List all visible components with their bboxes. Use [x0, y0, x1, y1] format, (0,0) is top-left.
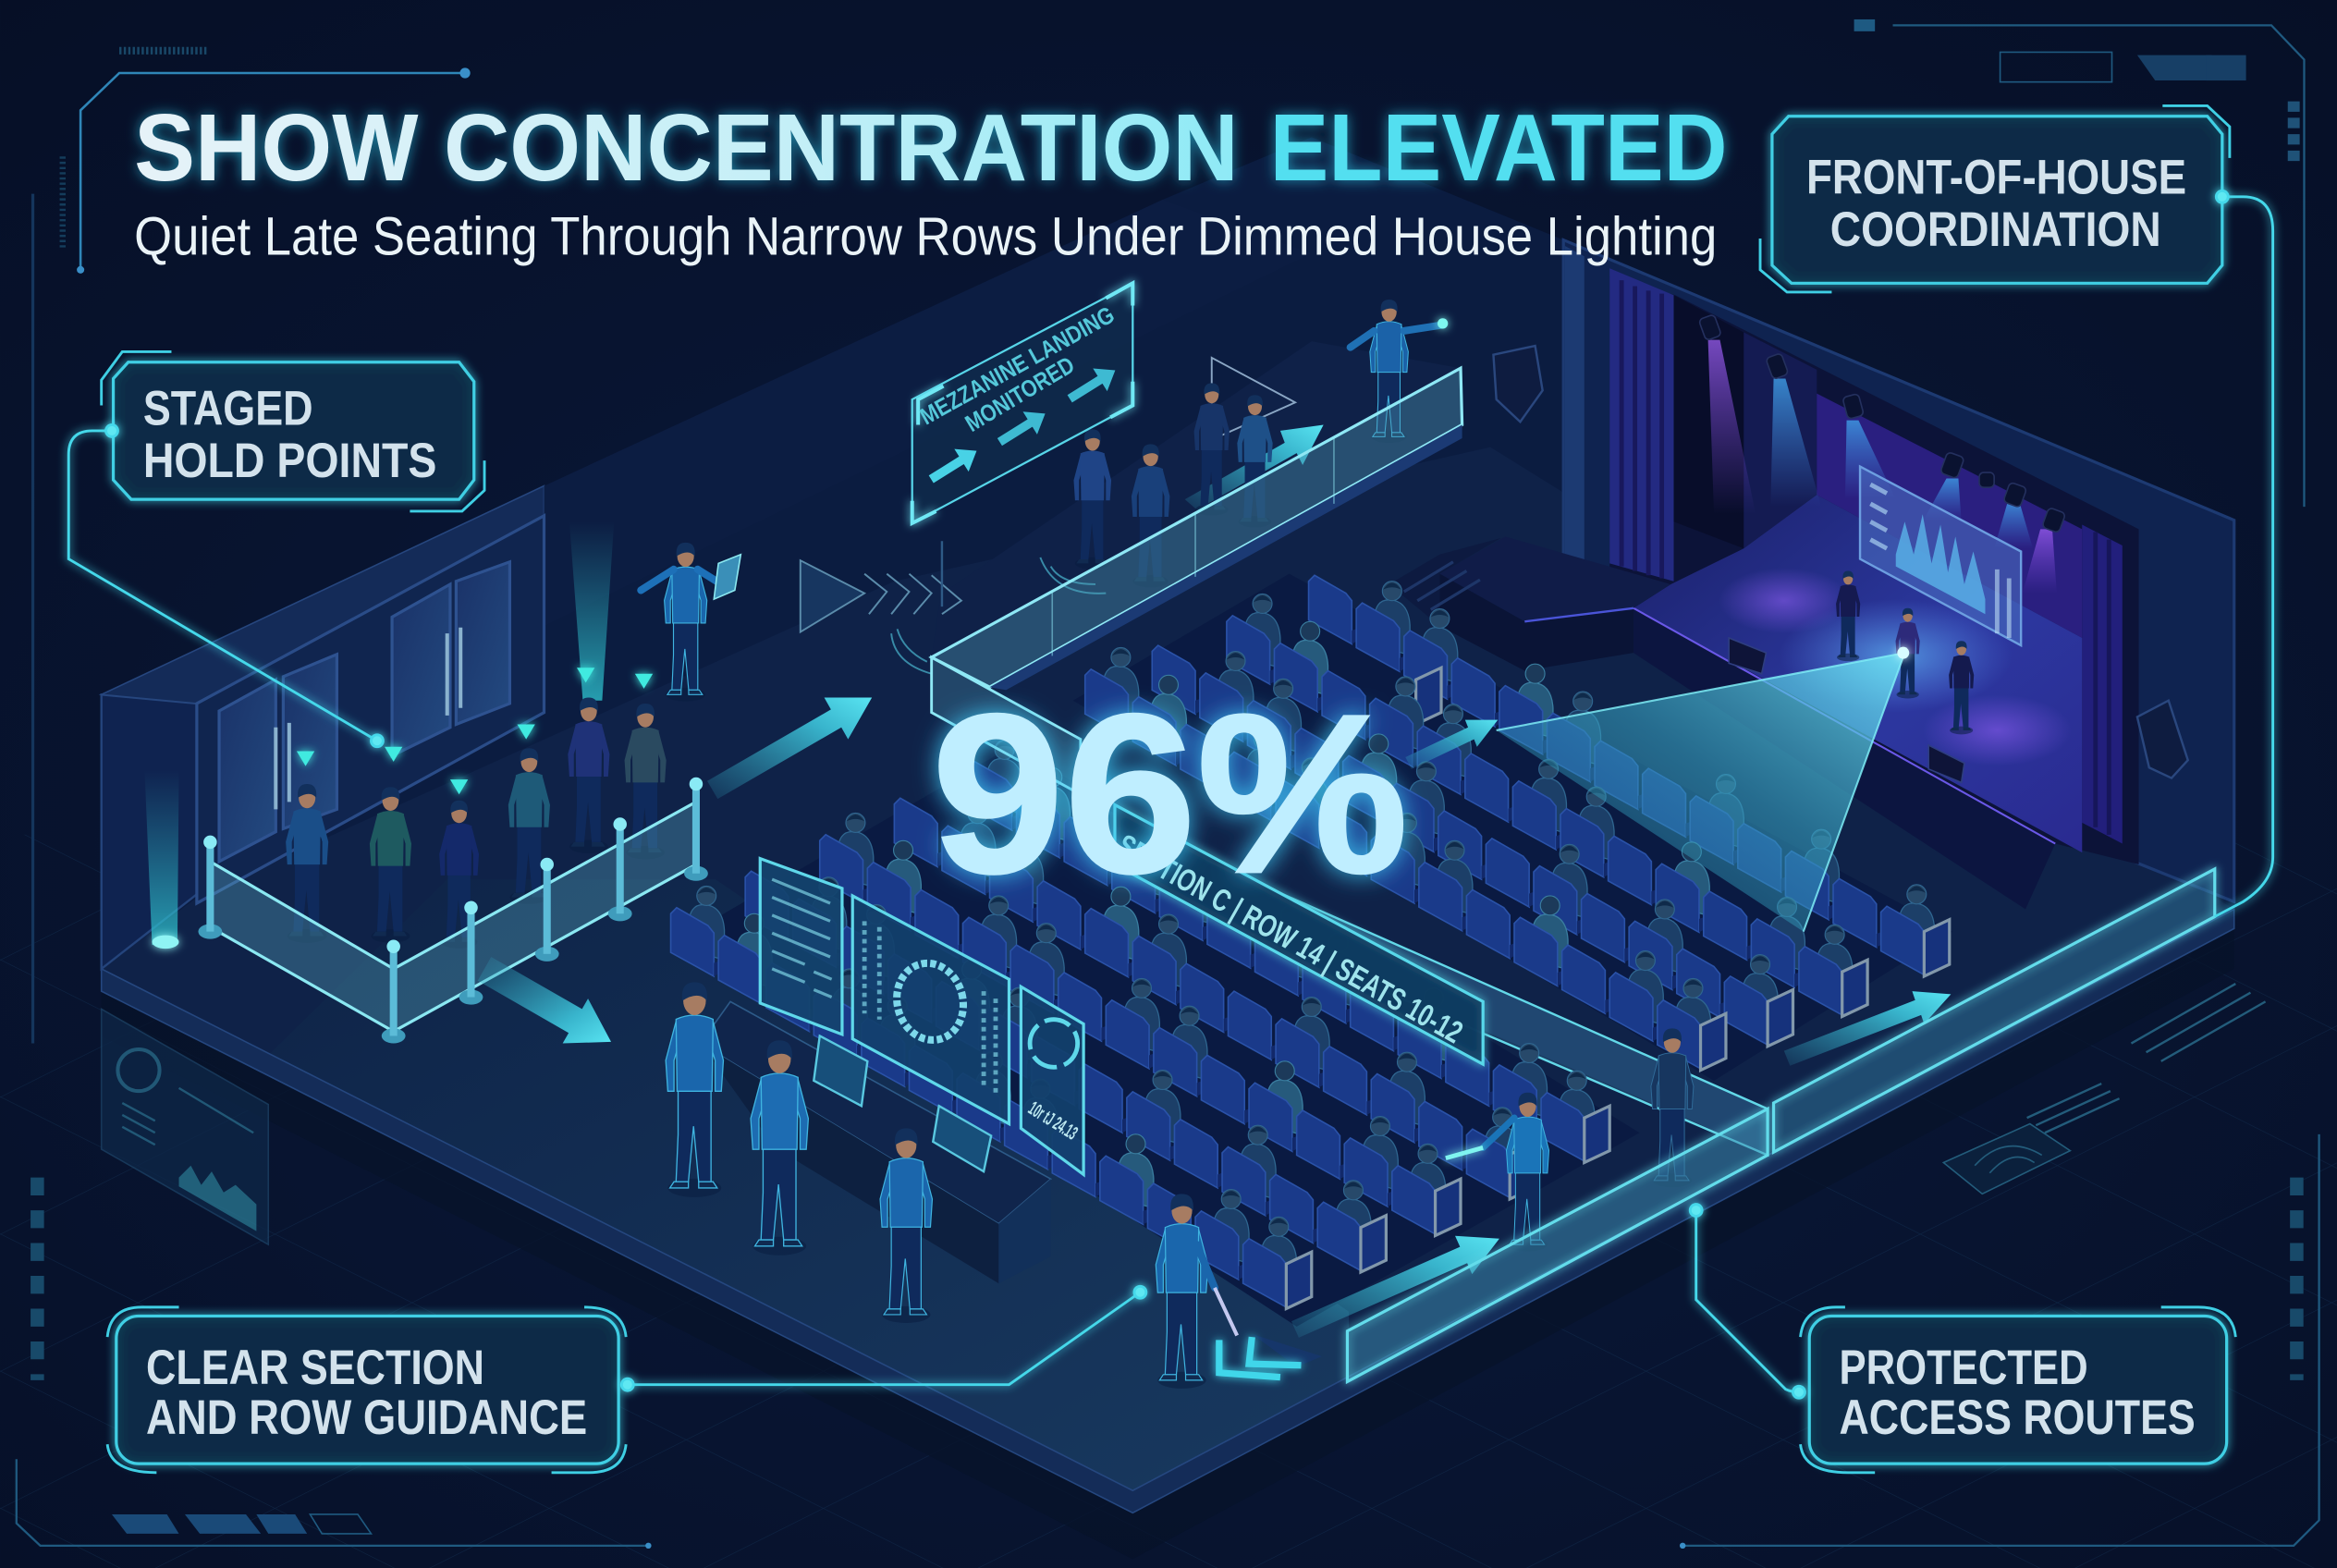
- callout: protected access routes: PROTECTED: [1839, 1341, 2088, 1395]
- performers: [1836, 570, 1974, 734]
- wing pier: [1565, 246, 1585, 563]
- spotlight beams: [1708, 340, 2057, 594]
- connector: clear section and row guidance: [621, 1286, 1146, 1390]
- stage monitors: [1729, 638, 1964, 782]
- seat guidance sign: [1111, 805, 1483, 1064]
- lobby doors: [197, 516, 544, 903]
- mezzanine sign: MONITORED: [961, 352, 1079, 437]
- connector: protected access routes: [1690, 1205, 1805, 1398]
- callout: front-of-house coordination: COORDINATION: [1830, 202, 2161, 257]
- floor chevrons: [1219, 1334, 1322, 1378]
- screen: gauge: 10r tJ 24.13: [1024, 1097, 1082, 1145]
- stage light fixtures: [1698, 314, 2066, 533]
- left curtain: [1609, 268, 1674, 582]
- lobby beam lights: [144, 521, 614, 949]
- HUD frame top right: [1854, 19, 2304, 507]
- front glass rail: [1347, 869, 2215, 1381]
- connector: staged hold points: [68, 424, 383, 747]
- mezzanine deck: [932, 341, 1462, 687]
- chevrons: [801, 560, 961, 632]
- background floor grid: [0, 835, 2337, 1568]
- rail underside: [990, 424, 1462, 690]
- mezzanine: [801, 300, 1462, 794]
- mezzanine sign: [912, 283, 1132, 523]
- mezzanine staff: [1351, 300, 1443, 443]
- aisle staff: [1156, 1028, 1694, 1389]
- seat guidance sign: SECTION C | ROW 14 | SEATS 10-12: [1111, 827, 1468, 1050]
- callout: front-of-house coordination: [1760, 105, 2230, 292]
- callout: clear section and row guidance: [107, 1307, 626, 1473]
- hold point markers: [297, 668, 653, 794]
- callout: front-of-house coordination: FRONT-OF-HOUSE: [1806, 151, 2186, 205]
- title: SHOW CONCENTRATION: [134, 94, 1239, 201]
- wing panel: [1744, 333, 1817, 548]
- lobby staff: [641, 543, 740, 702]
- stage front face: [1633, 608, 2055, 909]
- seating block: right and upper: [1085, 575, 1950, 1071]
- stage house: [1563, 240, 2234, 909]
- desk staff: [666, 982, 932, 1323]
- stage floor: [1633, 495, 2082, 852]
- spotlight cone edges: [1497, 653, 1904, 932]
- speakers: [1493, 346, 2188, 778]
- dark wing gap: [1674, 295, 1744, 548]
- callout: clear section and row guidance: CLEAR SECTION: [146, 1341, 484, 1395]
- callout: staged hold points: HOLD POINTS: [143, 434, 436, 488]
- callout: protected access routes: ACCESS ROUTES: [1839, 1390, 2196, 1445]
- mezzanine guests: [1073, 383, 1273, 587]
- floor: [102, 447, 2234, 1490]
- info screens: [760, 859, 1083, 1174]
- callout: staged hold points: STAGED: [143, 381, 313, 435]
- HUD frame bottom right: [1680, 1134, 2319, 1549]
- aisle glass rail: [1168, 843, 1768, 1155]
- stage opening: [1609, 276, 2139, 864]
- screen: seat map: [852, 896, 1009, 1124]
- screen: gauge: [1021, 986, 1083, 1174]
- stage screen: [1860, 467, 2021, 645]
- landing frame: [1212, 358, 1295, 440]
- floor ripples: [891, 557, 1106, 674]
- faint panels lower right: [1943, 984, 2266, 1194]
- left wall face: [102, 694, 197, 969]
- mezzanine sign: MEZZANINE LANDING: [916, 302, 1119, 430]
- door group left: [219, 655, 336, 862]
- big number: 96%: [932, 667, 1409, 920]
- floor lip: [102, 909, 2234, 1513]
- spotlight cone: [1497, 653, 1904, 932]
- spotlight source: [1897, 647, 1909, 659]
- queue barrier: [198, 778, 708, 1044]
- glass return: [932, 657, 1081, 794]
- control desk: [701, 1001, 1051, 1283]
- screen: list: [760, 859, 842, 1035]
- proscenium wall: [1563, 240, 2234, 901]
- callout: clear section and row guidance: AND ROW GUIDANCE: [146, 1390, 587, 1445]
- callout: staged hold points: [102, 351, 484, 511]
- callout: protected access routes: [1801, 1307, 2235, 1473]
- HUD frame bottom left: [17, 1178, 652, 1549]
- title: ELEVATED: [1270, 94, 1728, 201]
- foyer floor: [268, 879, 1349, 1490]
- lobby wall: [102, 486, 544, 704]
- queue of guests: [286, 697, 667, 949]
- aisle band: [1073, 790, 1768, 1155]
- route arrows: [478, 697, 1951, 1338]
- HUD frame top left: [33, 51, 471, 1044]
- seating block: front: [671, 740, 1609, 1308]
- platform underside: [102, 928, 2234, 1559]
- connector: front-of-house coordination: [2215, 190, 2273, 916]
- seating floor: [693, 574, 1952, 1327]
- subtitle: Quiet Late Seating Through Narrow Rows Under Dimmed House Lighting: [134, 207, 1717, 267]
- mezzanine glass rail: [932, 368, 1462, 687]
- light pools: [1719, 568, 1850, 633]
- door handles: [275, 628, 460, 809]
- back wall: [1817, 394, 2082, 638]
- stage apron and steps: [1389, 536, 1670, 670]
- faint dashboard lower left: [102, 1009, 268, 1244]
- mezzanine route arrow: [1185, 424, 1324, 509]
- staff wand light: [1438, 318, 1448, 328]
- door group right: [392, 562, 509, 755]
- rail post: [941, 541, 943, 606]
- right curtain: [2082, 524, 2123, 843]
